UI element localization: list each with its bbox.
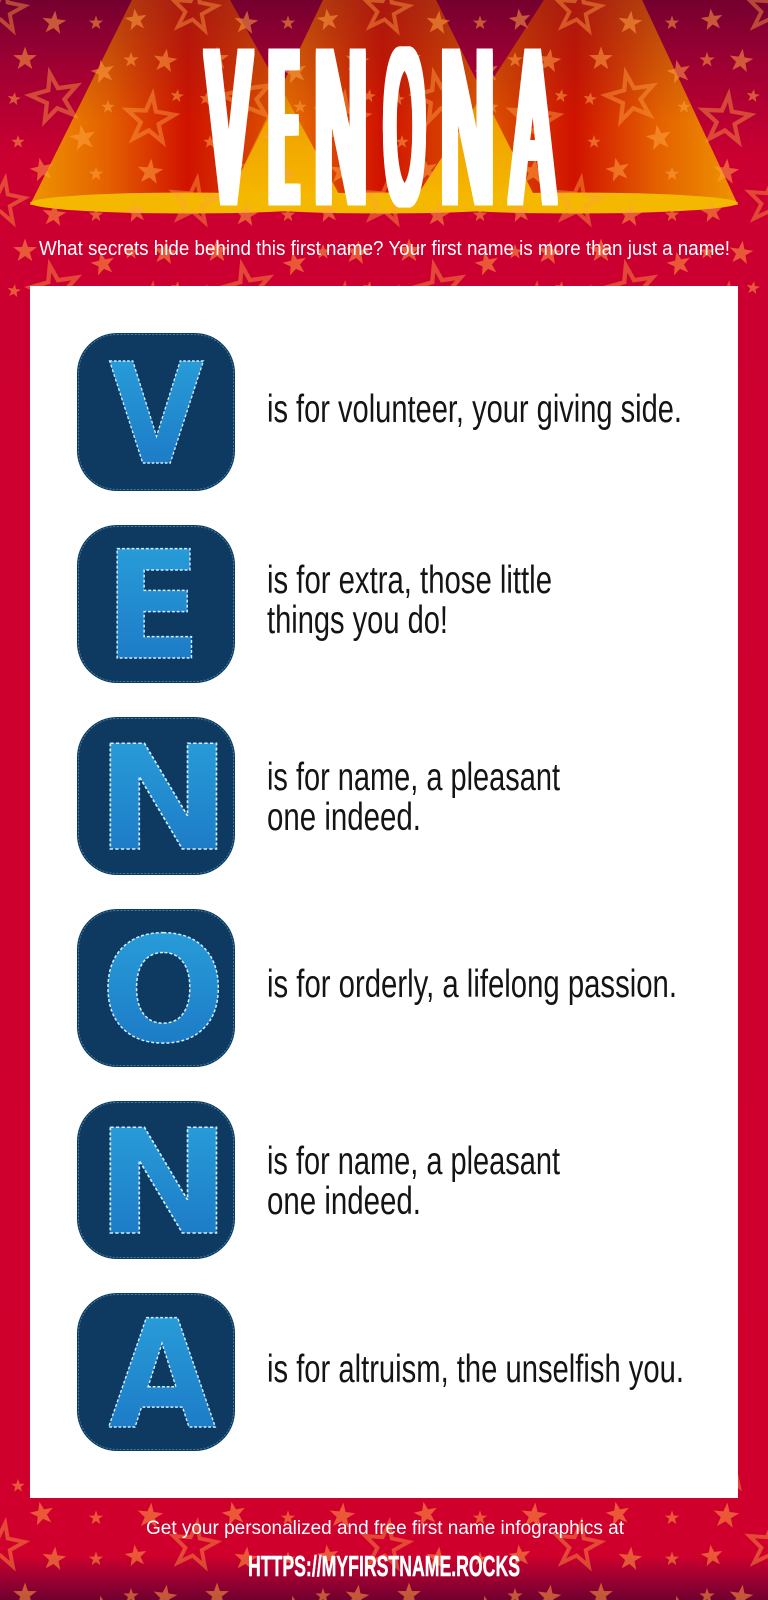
row: A bbox=[77, 1289, 684, 1463]
icon: letter N: N bbox=[95, 715, 231, 884]
icon: letter N second: N bbox=[95, 1099, 231, 1268]
title: N bbox=[441, 2, 494, 250]
subtitle: What secrets hide behind this first name? Your first name is more than just a name! bbox=[39, 238, 730, 260]
icon: letter V: V bbox=[109, 334, 204, 497]
title: V bbox=[208, 2, 249, 250]
footer url: HTTPS://MYFIRSTNAME.ROCKS bbox=[248, 1551, 520, 1583]
title bbox=[202, 2, 558, 250]
text: E lines: things you do! bbox=[267, 599, 448, 642]
text: N lines: is for name, a pleasant bbox=[267, 756, 560, 799]
text: N lines: one indeed. bbox=[267, 796, 421, 839]
icon: letter E bbox=[77, 520, 235, 694]
text: E lines: is for extra, those little bbox=[267, 559, 552, 602]
icon: letter A: A bbox=[108, 1289, 216, 1463]
title: E bbox=[272, 2, 295, 250]
title: O bbox=[385, 2, 424, 250]
title: A bbox=[512, 2, 553, 250]
panel: name letters bbox=[30, 286, 738, 1498]
icon: letter O: O bbox=[101, 906, 226, 1076]
row: N second bbox=[77, 1099, 560, 1268]
icon: letter E: E bbox=[104, 520, 202, 694]
row: N bbox=[77, 715, 560, 884]
icon: letter V bbox=[77, 333, 235, 497]
title: N bbox=[315, 2, 367, 250]
footer text: Get your personalized and free first name infographics at bbox=[146, 1517, 625, 1539]
row: E bbox=[77, 520, 552, 694]
row: O bbox=[77, 906, 677, 1076]
row: V bbox=[77, 333, 682, 497]
text: N second lines: one indeed. bbox=[267, 1180, 421, 1223]
text: N second lines: is for name, a pleasant bbox=[267, 1140, 560, 1183]
